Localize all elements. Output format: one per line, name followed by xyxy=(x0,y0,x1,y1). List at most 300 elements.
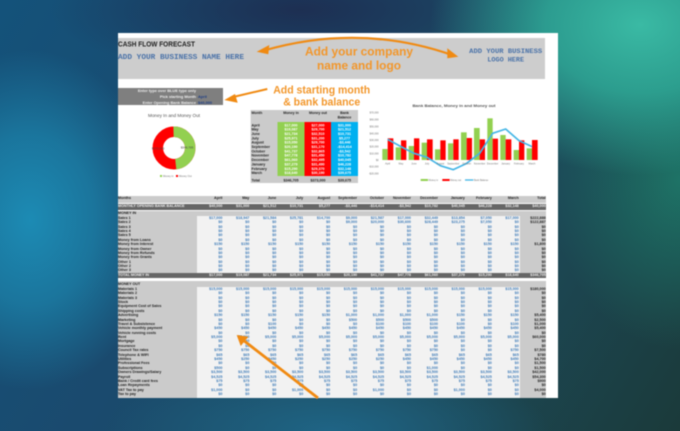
table section: money out rows: $450 xyxy=(214,357,222,361)
table section: money out rows: $0 xyxy=(218,392,222,396)
bar and line chart: bank balance, money in and money out: $50,000 xyxy=(370,125,379,128)
table section: money out rows: $1,000 xyxy=(454,388,465,392)
table section: money out rows: $0 xyxy=(353,296,357,300)
table section: money out rows: $0 xyxy=(218,309,222,313)
callout: add your company name and logo: Add your company xyxy=(305,44,413,58)
table section: money out rows: Utilities xyxy=(118,357,131,361)
row: total money in: $41,737 xyxy=(371,273,384,277)
table header: months: October xyxy=(370,196,384,200)
table section: money in rows: $21,584 xyxy=(263,216,276,220)
summary table: month, money in, money out, bank balance: $31,170 xyxy=(312,145,324,149)
table section: money out rows: $0 xyxy=(488,348,492,352)
table section: money in rows: $0 xyxy=(407,238,411,242)
summary table: month, money in, money out, bank balance: $32,495 xyxy=(312,158,324,162)
summary table: month, money in, money out, bank balance xyxy=(250,110,359,184)
table section: money in rows: $14,700 xyxy=(317,216,330,220)
table section: money out rows: $750 xyxy=(214,348,222,352)
table section: money out rows: $0 xyxy=(272,383,276,387)
heading: money in xyxy=(118,211,546,216)
table section: money out rows: $0 xyxy=(488,331,492,335)
table section: money out rows: Travel & Subsistence xyxy=(118,322,155,326)
table section: money in rows: $0 xyxy=(218,264,222,268)
table section: money out rows: $0 xyxy=(461,296,465,300)
table section: money in rows: $0 xyxy=(353,247,357,251)
summary table: month, money in, money out, bank balance: March xyxy=(252,171,262,175)
table section: money out rows: $450 xyxy=(484,326,492,330)
table section: money in rows: $7,050 xyxy=(481,220,492,224)
table section: money in rows: $0 xyxy=(434,255,438,259)
bar and line chart: bank balance, money in and money out: April xyxy=(385,163,391,166)
arrow: curved double-headed arrow to name and logo xyxy=(257,38,458,58)
bar and line chart: bank balance, money in and money out: $60,000 xyxy=(370,118,379,121)
table section: money in rows: $0 xyxy=(299,229,303,233)
table section: money out rows: $0 xyxy=(299,304,303,308)
table section: money out rows: $0 xyxy=(488,304,492,308)
row: monthly opening bank balance: -$3,446 xyxy=(345,204,357,208)
table section: money out rows: $250 xyxy=(322,357,330,361)
table section: money in rows: $0 xyxy=(299,220,303,224)
table section: money out rows: Mortgage xyxy=(118,339,135,343)
bar and line chart: bank balance, money in and money out: Money in xyxy=(429,180,439,182)
table section: money out rows: $0 xyxy=(299,344,303,348)
table section: money out rows: $0 xyxy=(326,383,330,387)
table section: money out rows: $3,500 xyxy=(265,370,276,374)
table section: money out rows: $65 xyxy=(459,353,465,357)
table section: money out rows: Council Tax rates xyxy=(118,348,148,352)
row: total money in: $21,734 xyxy=(263,273,276,277)
table section: money out rows: $15,000 xyxy=(236,287,249,291)
summary table: month, money in, money out, bank balance: $21,734 xyxy=(284,132,298,136)
table section: money out rows: $2,500 xyxy=(534,318,546,322)
table section: money out rows: $0 xyxy=(218,361,222,365)
summary table: month, money in, money out, bank balance: November xyxy=(252,154,270,158)
table section: money out rows: $450 xyxy=(376,326,384,330)
table section: money out rows: $0 xyxy=(542,331,546,335)
table section: money out rows: $0 xyxy=(434,291,438,295)
table section: money in rows: $0 xyxy=(245,268,249,272)
table section: money in rows: $0 xyxy=(272,238,276,242)
summary table: month, money in, money out, bank balance: $31,000 xyxy=(338,123,351,127)
summary table: month, money in, money out, bank balance: September xyxy=(252,145,271,149)
summary table: month, money in, money out, bank balance: $40,045 xyxy=(338,158,351,162)
table section: money out rows: $5,000 xyxy=(238,335,249,339)
table section: money out rows: $0 xyxy=(245,318,249,322)
table section: money out rows: $0 xyxy=(434,331,438,335)
table section: money out rows: $0 xyxy=(272,361,276,365)
table section: money out rows: $0 xyxy=(299,383,303,387)
table section: money out rows: $4,525 xyxy=(507,375,519,379)
table section: money in rows: $0 xyxy=(434,238,438,242)
table section: money out rows: $65 xyxy=(513,353,519,357)
table section: money in rows: $0 xyxy=(299,264,303,268)
table section: money in rows: Other 3 xyxy=(118,268,131,272)
table section: money out rows: $0 xyxy=(380,361,384,365)
table section: money in rows: Money from Owner xyxy=(118,247,151,251)
table section: money out rows: $500 xyxy=(403,318,411,322)
table section: money in rows: $0 xyxy=(218,260,222,264)
table section: money out rows: $0 xyxy=(515,304,519,308)
row: total money in: $15,290 xyxy=(478,273,492,277)
table section: money in rows: $0 xyxy=(299,225,303,229)
table header: months: August xyxy=(317,196,330,200)
table section: money out rows: $65 xyxy=(378,353,384,357)
table section: money out rows: Subscriptions xyxy=(118,366,143,370)
summary table: month, money in, money out, bank balance: May xyxy=(252,128,258,132)
table section: money in rows: $0 xyxy=(326,233,330,237)
table section: money in rows: $0 xyxy=(245,220,249,224)
table section: money out rows: $0 xyxy=(326,300,330,304)
summary table: month, money in, money out, bank balance: July xyxy=(252,136,259,140)
table section: money out rows: $450 xyxy=(457,357,465,361)
table section: money out rows: Advertising xyxy=(118,313,138,317)
table section: money out rows: $0 xyxy=(488,388,492,392)
table section: money out rows: $1,000 xyxy=(400,313,411,317)
table section: money out rows: $7,500 xyxy=(534,348,546,352)
table section: money out rows: $0 xyxy=(218,322,222,326)
table section: money out rows: $0 xyxy=(353,361,357,365)
table section: money out rows: $0 xyxy=(272,318,276,322)
table section: money out rows: Loan Repayments xyxy=(118,383,150,387)
table section: money out rows: $0 xyxy=(245,361,249,365)
table section: money out rows: $0 xyxy=(218,383,222,387)
row: total money in: $18,640 xyxy=(505,273,519,277)
panel: spreadsheet sheet xyxy=(118,33,558,398)
table section: money out rows: $4,525 xyxy=(481,375,492,379)
table section: money out rows: $450 xyxy=(403,357,411,361)
table section: money out rows: $5,400 xyxy=(534,326,546,330)
table section: money in rows: $0 xyxy=(353,251,357,255)
table header: months: September xyxy=(338,196,357,200)
table section: money in rows: $0 xyxy=(245,233,249,237)
summary table: month, money in, money out, bank balance: $29,700 xyxy=(312,128,324,132)
bar and line chart: bank balance, money in and money out: May xyxy=(399,163,404,166)
table section: money out rows: $5,000 xyxy=(319,335,330,339)
row: total money in: $25,971 xyxy=(290,273,303,277)
table section: money out rows: $0 xyxy=(542,339,546,343)
arrow: to starting month box xyxy=(224,89,267,103)
table section: money in rows: $0 xyxy=(515,268,519,272)
table section: money out rows: $5,000 xyxy=(507,335,519,339)
table section: money out rows: Materials 1 xyxy=(118,287,137,291)
table section: money out rows: $0 xyxy=(407,309,411,313)
table section: money out rows: $3,500 xyxy=(319,370,330,374)
table section: money in rows: $0 xyxy=(542,264,546,268)
callout: add starting month and bank balance xyxy=(273,84,370,108)
table header: months: Months xyxy=(118,196,131,200)
table section: money in rows: $0 xyxy=(515,260,519,264)
table section: money in rows: $0 xyxy=(380,268,384,272)
bar and line chart: bank balance, money in and money out: June xyxy=(411,163,417,166)
table section: money in rows: $0 xyxy=(488,238,492,242)
table section: money out rows: $0 xyxy=(407,388,411,392)
table section: money out rows: $0 xyxy=(515,361,519,365)
table section: money out rows: $0 xyxy=(353,339,357,343)
table section: money in rows: $0 xyxy=(407,268,411,272)
summary table: month, money in, money out, bank balance: $20,190 xyxy=(284,145,298,149)
table section: money in rows: $0 xyxy=(326,229,330,233)
summary table: month, money in, money out, bank balance: $30,190 xyxy=(312,171,324,175)
table section: money in rows: $0 xyxy=(461,229,465,233)
table section: money out rows: $500 xyxy=(376,318,384,322)
table section: money in rows: $0 xyxy=(353,225,357,229)
table section: money in rows: $18,947 xyxy=(236,216,249,220)
bar and line chart: bank balance, money in and money out: $30,000 xyxy=(370,139,379,142)
table section: money in rows: Sales 1 xyxy=(118,216,131,220)
input box: starting month and balance xyxy=(118,88,223,105)
table section: money out rows: $0 xyxy=(326,322,330,326)
table section: money out rows: $3,500 xyxy=(454,370,465,374)
table section: money in rows: $0 xyxy=(461,255,465,259)
table section: money out rows: $3,500 xyxy=(292,370,303,374)
summary table: month, money in, money out, bank balance: $17,000 xyxy=(284,123,298,127)
table section: money out rows: $0 xyxy=(515,383,519,387)
summary table: month, money in, money out, bank balance: December xyxy=(252,158,269,162)
table section: money out rows: $0 xyxy=(299,300,303,304)
table section: money out rows: $0 xyxy=(407,300,411,304)
table section: money out rows: $5,000 xyxy=(481,335,492,339)
table section: money out rows: $65 xyxy=(405,353,411,357)
table section: money out rows: $0 xyxy=(515,388,519,392)
table section: money out rows: $0 xyxy=(488,318,492,322)
donut chart: money in and money out: Money In and Money Out xyxy=(148,113,201,119)
table section: money out rows: $0 xyxy=(272,296,276,300)
table header: months: February xyxy=(476,196,492,200)
table header: months: July xyxy=(296,196,303,200)
table section: money out rows: $3,500 xyxy=(211,370,222,374)
callout: add your company name and logo xyxy=(305,44,413,72)
table section: money out rows: $0 xyxy=(542,291,546,295)
table section: money in rows: $0 xyxy=(326,268,330,272)
table section: money in rows: $0 xyxy=(488,251,492,255)
table section: money in rows: $0 xyxy=(488,225,492,229)
table section: money out rows: $750 xyxy=(430,348,438,352)
summary table: month, money in, money out, bank balance: $15,290 xyxy=(284,167,298,171)
table section: money out rows: Owners Drawings/Salary xyxy=(118,370,161,374)
table section: money in rows: $0 xyxy=(380,233,384,237)
row: total money in: $37,279 xyxy=(452,273,465,277)
row: total money in: $47,778 xyxy=(398,273,411,277)
table section: money in rows: $0 xyxy=(407,233,411,237)
bar and line chart: bank balance, money in and money out xyxy=(369,104,538,182)
table section: money in rows: $0 xyxy=(245,225,249,229)
table section: money out rows: $4,525 xyxy=(346,375,357,379)
table section: money out rows: Shipping costs xyxy=(118,309,144,313)
table section: money out rows: $0 xyxy=(461,383,465,387)
summary table: month, money in, money out, bank balance: $32,148 xyxy=(338,167,351,171)
callout: add starting month and bank balance: & bank balance xyxy=(283,96,360,108)
table section: money out rows: $75 xyxy=(324,379,330,383)
table section: money out rows: $0 xyxy=(299,296,303,300)
row: monthly opening bank balance: -$14,414 xyxy=(370,204,384,208)
table section: money out rows: $15,000 xyxy=(290,287,303,291)
table section: money out rows: $250 xyxy=(241,357,249,361)
table section: money out rows: $0 xyxy=(245,304,249,308)
table section: money out rows: $1,000 xyxy=(346,313,357,317)
summary table: month, money in, money out, bank balance: $373,000 xyxy=(310,178,326,182)
table section: money out rows: $75 xyxy=(486,379,492,383)
table section: money out rows: $0 xyxy=(299,291,303,295)
table section: money out rows: $0 xyxy=(353,300,357,304)
table section: money out rows: $0 xyxy=(461,331,465,335)
table section: money out rows: $150 xyxy=(484,313,492,317)
table section: money out rows: Insurance xyxy=(118,344,135,348)
table section: money out rows: $0 xyxy=(353,309,357,313)
table section: money out rows: $1,000 xyxy=(373,313,384,317)
table section: money in rows: $150 xyxy=(376,242,384,246)
table section: money in rows: $222,888 xyxy=(530,216,546,220)
bar and line chart: bank balance, money in and money out: $10,000 xyxy=(370,152,379,155)
table section: money out rows: $0 xyxy=(272,331,276,335)
bar and line chart: bank balance, money in and money out: Money out xyxy=(450,179,462,182)
table section: money out rows: $450 xyxy=(430,357,438,361)
table section: money in rows: $150 xyxy=(511,242,519,246)
bar and line chart: bank balance, money in and money out: -$10,000 xyxy=(369,166,379,169)
table section: money out rows: $65 xyxy=(324,353,330,357)
table section: money in rows: $0 xyxy=(515,247,519,251)
table section: money out rows: $0 xyxy=(299,339,303,343)
table section: money out rows: $0 xyxy=(407,392,411,396)
summary table: month, money in, money out, bank balance: $32,865 xyxy=(312,149,324,153)
table section: money out rows: $4,525 xyxy=(265,375,276,379)
table section: money out rows: $15,000 xyxy=(263,287,276,291)
row: monthly opening bank balance: $10,782 xyxy=(425,204,438,208)
table section: money in rows: $0 xyxy=(515,229,519,233)
table section: money out rows: $3,500 xyxy=(481,370,492,374)
table section: money in rows: $0 xyxy=(245,238,249,242)
table section: money out rows: $750 xyxy=(322,348,330,352)
table section: money out rows: $750 xyxy=(349,348,357,352)
table section: money in rows: $0 xyxy=(380,260,384,264)
table section: money out rows: Stock xyxy=(118,300,128,304)
table section: money out rows: $75 xyxy=(378,379,384,383)
table section: money out rows: $150 xyxy=(322,313,330,317)
table section: money in rows: $0 xyxy=(434,268,438,272)
row: total money in: $61,060 xyxy=(425,273,438,277)
table section: money in rows xyxy=(118,216,546,273)
table section: money out rows: $4,525 xyxy=(211,375,222,379)
table section: money out rows: $15,000 xyxy=(478,287,492,291)
table section: money out rows: $3,500 xyxy=(238,370,249,374)
table section: money in rows: $21,587 xyxy=(371,216,384,220)
table section: money in rows: Sales 5 xyxy=(118,233,131,237)
row: total money in: $20,190 xyxy=(344,273,357,277)
table section: money out rows: $0 xyxy=(488,322,492,326)
bar and line chart: bank balance, money in and money out: December xyxy=(487,163,499,166)
table section: money in rows: Money from Loans xyxy=(118,238,151,242)
table section: money in rows: $23,275 xyxy=(452,220,465,224)
summary table: month, money in, money out, bank balance: $37,279 xyxy=(284,162,298,166)
title and business name: ADD YOUR BUSINESS NAME HERE xyxy=(118,54,245,62)
table section: money out rows: $0 xyxy=(299,361,303,365)
table section: money out rows: $15,000 xyxy=(398,287,411,291)
table section: money out rows: $5,400 xyxy=(534,313,546,317)
table section: money out rows: $0 xyxy=(542,392,546,396)
table section: money in rows: $0 xyxy=(434,264,438,268)
table section: money out rows: $4,525 xyxy=(319,375,330,379)
table section: money out rows: $0 xyxy=(326,309,330,313)
table section: money in rows: $0 xyxy=(245,251,249,255)
table section: money in rows: $0 xyxy=(326,255,330,259)
table section: money out rows: $15,000 xyxy=(452,287,465,291)
table section: money out rows: $750 xyxy=(511,348,519,352)
table section: money out rows: $180,000 xyxy=(530,287,546,291)
table section: money out rows: $3,500 xyxy=(507,370,519,374)
table section: money out rows: $0 xyxy=(488,392,492,396)
table section: money in rows: Money from Grants xyxy=(118,255,152,259)
table section: money in rows: $0 xyxy=(218,255,222,259)
table section: money out rows: $0 xyxy=(461,309,465,313)
table section: money out rows: $0 xyxy=(434,309,438,313)
table section: money out rows: $0 xyxy=(353,383,357,387)
input box: starting month and balance: Pick starting Month xyxy=(160,94,196,99)
table section: money out rows: $0 xyxy=(407,383,411,387)
summary table: month, money in, money out, bank balance: Money out xyxy=(309,111,328,115)
summary table: month, money in, money out, bank balance: January xyxy=(252,162,265,166)
summary table: month, money in, money out, bank balance: August xyxy=(252,141,265,145)
table section: money out rows: $0 xyxy=(461,300,465,304)
table section: money out rows: $450 xyxy=(403,326,411,330)
table section: money out rows: $0 xyxy=(407,361,411,365)
table section: money in rows: $0 xyxy=(245,255,249,259)
summary table: month, money in, money out, bank balance: $39,675 xyxy=(338,178,351,182)
table section: money out rows: $0 xyxy=(407,344,411,348)
table section: money out rows: $750 xyxy=(295,348,303,352)
row: monthly opening bank balance: $40,000 xyxy=(209,204,222,208)
table section: money out rows: $0 xyxy=(488,383,492,387)
table section: money out rows: $0 xyxy=(299,309,303,313)
table section: money out rows: $0 xyxy=(407,339,411,343)
table section: money in rows: $0 xyxy=(488,268,492,272)
table section: money in rows: $0 xyxy=(272,247,276,251)
table section: money in rows: $0 xyxy=(542,238,546,242)
table section: money out rows: $0 xyxy=(380,366,384,370)
table section: money in rows: $0 xyxy=(542,229,546,233)
callout: add starting month and bank balance: Add starting month xyxy=(273,84,370,96)
row: monthly opening bank balance: $40,000 xyxy=(532,204,546,208)
table section: money in rows: $0 xyxy=(326,220,330,224)
table section: money in rows: $0 xyxy=(245,229,249,233)
table section: money out rows: $250 xyxy=(349,357,357,361)
table section: money in rows: $0 xyxy=(434,260,438,264)
table section: money out rows: $0 xyxy=(326,304,330,308)
summary table: month, money in, money out, bank balance: $29,370 xyxy=(312,167,324,171)
table section: money out rows: $0 xyxy=(515,309,519,313)
table header: months: April xyxy=(214,196,222,200)
table section: money out rows: $0 xyxy=(326,388,330,392)
table section: money out rows: $0 xyxy=(488,291,492,295)
table section: money out rows: $0 xyxy=(353,366,357,370)
table section: money out rows: $0 xyxy=(299,366,303,370)
table section: money in rows: $0 xyxy=(407,260,411,264)
table section: money in rows: $150 xyxy=(484,242,492,246)
table section: money out rows: $15,000 xyxy=(371,287,384,291)
table section: money out rows: $0 xyxy=(542,304,546,308)
summary table: month, money in, money out, bank balance: $346,705 xyxy=(284,178,298,182)
row: total money in: $17,000 xyxy=(209,273,222,277)
table section: money out rows: $0 xyxy=(299,322,303,326)
table section: money in rows: $0 xyxy=(461,233,465,237)
table header: months xyxy=(118,196,546,203)
bar and line chart: bank balance, money in and money out: July xyxy=(425,163,430,166)
table section: money out rows: $0 xyxy=(515,366,519,370)
table header: months: June xyxy=(268,196,276,200)
table section: money out rows: $150 xyxy=(241,313,249,317)
title and business name: CASH FLOW FORECAST xyxy=(118,40,196,48)
summary table: month, money in, money out, bank balance: February xyxy=(252,167,267,171)
table section: money in rows: $0 xyxy=(542,255,546,259)
table section: money in rows: $0 xyxy=(380,251,384,255)
table section: money out rows: $0 xyxy=(272,304,276,308)
